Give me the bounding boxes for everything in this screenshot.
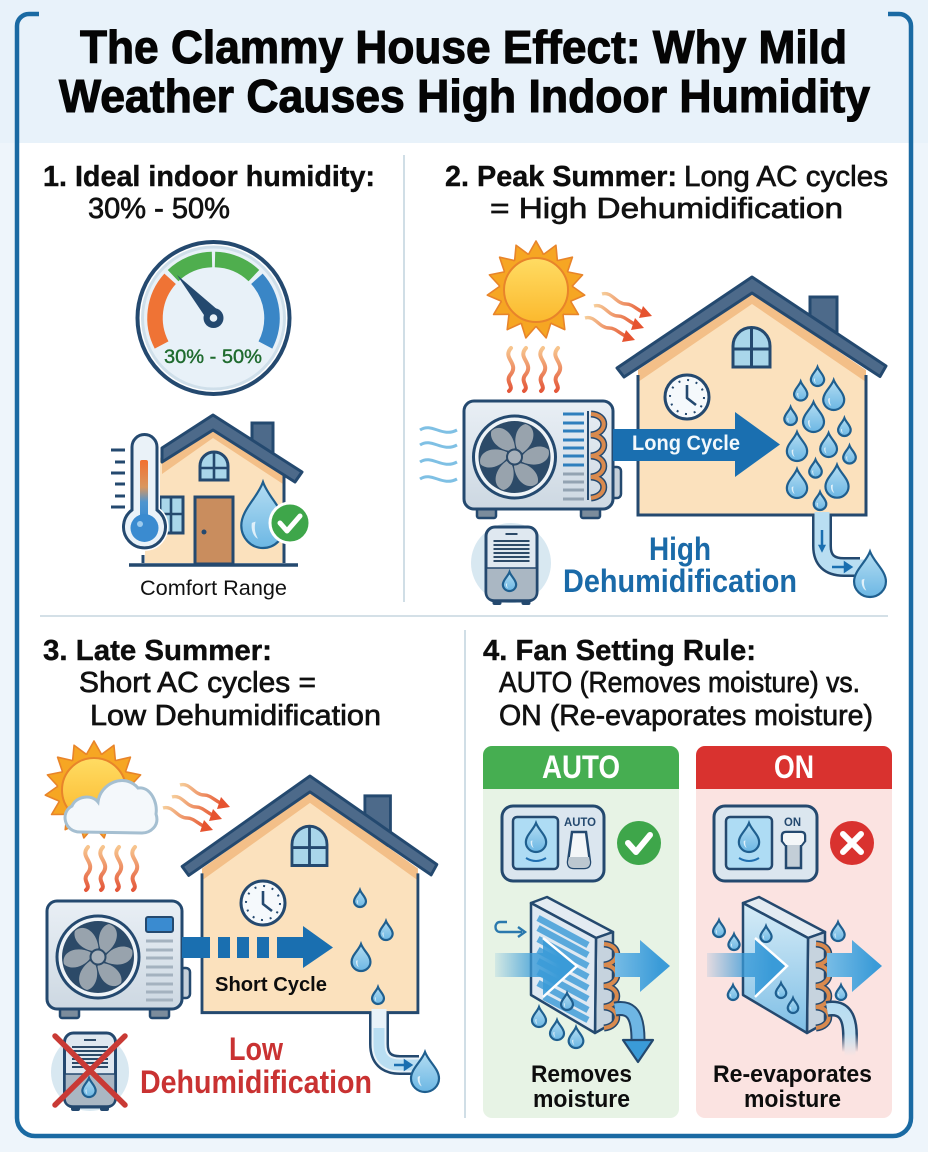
heading 3: Low Dehumidification — [90, 700, 381, 732]
heading 4 — [483, 635, 873, 732]
label: removes moisture: Removes — [531, 1061, 632, 1088]
fan switch: ON: ON — [784, 817, 801, 829]
heading 2: Long AC cycles — [684, 161, 888, 193]
title: Weather Causes High Indoor Humidity — [59, 70, 870, 122]
heat rising from unit — [508, 348, 560, 391]
fan switch: AUTO: AUTO — [564, 817, 596, 829]
caption: comfort range: Comfort Range — [140, 577, 287, 600]
card: ON — [696, 746, 892, 1118]
title — [59, 21, 870, 122]
card: AUTO — [483, 746, 679, 1118]
airflow out — [615, 940, 670, 992]
outdoor AC unit — [47, 901, 190, 1018]
label: high dehumidification — [563, 531, 797, 599]
heading 1: 1. Ideal indoor humidity: — [43, 161, 375, 193]
humidity gauge: 30% - 50% — [164, 346, 262, 368]
label: removes moisture — [531, 1061, 632, 1113]
title: The Clammy House Effect: Why Mild — [80, 21, 847, 73]
drain pipe: ON — [827, 1009, 850, 1056]
panel 3: late summer — [43, 635, 439, 1111]
airflow in — [707, 938, 787, 997]
heat rising from unit — [85, 847, 137, 890]
icon: check mark — [617, 821, 661, 865]
label: re-evaporates moisture — [713, 1061, 872, 1113]
icon: crossed-out dehumidifier — [51, 1033, 129, 1111]
airflow out — [827, 940, 882, 992]
label: low dehumidification: Low — [229, 1031, 283, 1067]
fan switch: AUTO — [502, 806, 604, 881]
icon: dehumidifier — [471, 523, 551, 605]
card header: ON: ON — [774, 749, 814, 785]
long cycle arrow — [613, 412, 780, 477]
large water drop — [411, 1052, 439, 1092]
heading 3 — [43, 635, 381, 732]
label: low dehumidification: Dehumidification — [140, 1064, 372, 1100]
panel 4: fan setting rule — [483, 635, 892, 1118]
fan switch: ON — [714, 806, 817, 881]
house with few drops — [182, 776, 437, 1013]
label: re-evaporates moisture: Re-evaporates — [713, 1061, 872, 1088]
icon: house with thermometer and drop — [111, 415, 310, 565]
label: removes moisture: moisture — [533, 1086, 630, 1113]
humidity gauge — [138, 242, 290, 394]
short cycle dashed arrow — [182, 926, 333, 968]
heading 1: 30% - 50% — [88, 193, 230, 225]
drain pipe — [820, 512, 864, 571]
icon: cross mark — [830, 821, 874, 865]
card header: AUTO — [483, 746, 679, 789]
card header: AUTO: AUTO — [542, 749, 620, 785]
heading 4: AUTO (Removes moisture) vs. — [499, 667, 860, 699]
drain pipe — [379, 1009, 424, 1069]
heading 2: 2. Peak Summer: — [445, 161, 677, 193]
wet cooling coil: ON — [743, 897, 829, 1033]
airflow in — [495, 938, 577, 997]
clock — [665, 375, 709, 419]
heat wave arrows — [163, 785, 230, 832]
house with moisture — [617, 277, 886, 515]
heading 1 — [43, 161, 375, 225]
heading 2 — [445, 161, 888, 225]
header band — [0, 0, 928, 143]
moisture drops — [784, 367, 856, 510]
panel 2: peak summer — [420, 161, 888, 605]
heading 4: 4. Fan Setting Rule: — [483, 635, 756, 667]
heading 3: 3. Late Summer: — [43, 635, 272, 667]
long cycle arrow: Long Cycle — [632, 431, 740, 455]
condensate drain arrow — [615, 1008, 653, 1062]
label: high dehumidification: High — [649, 531, 711, 567]
wind lines — [420, 428, 457, 481]
clock — [241, 881, 285, 925]
re-evaporating drops — [713, 920, 846, 1013]
cooling coil: AUTO — [531, 897, 617, 1033]
heat wave arrows — [585, 294, 652, 342]
heading 2: = High Dehumidification — [490, 193, 843, 225]
icon: sun — [486, 241, 586, 340]
airflow in outline — [543, 938, 577, 997]
heading 4: ON (Re-evaporates moisture) — [499, 700, 873, 732]
icon: sun behind cloud — [44, 741, 157, 840]
label: high dehumidification: Dehumidification — [563, 563, 797, 599]
moisture drops — [352, 890, 393, 1004]
label: low dehumidification — [140, 1031, 372, 1100]
falling drops — [532, 993, 583, 1048]
small bypass arrow — [496, 922, 525, 937]
panel 1: ideal indoor humidity — [43, 161, 375, 600]
large water drop — [854, 552, 886, 597]
airflow in outline — [755, 938, 787, 997]
heading 3: Short AC cycles = — [79, 667, 316, 699]
outdoor AC unit — [464, 401, 621, 518]
card header: ON — [696, 746, 892, 789]
label: short cycle: Short Cycle — [215, 974, 327, 996]
label: re-evaporates moisture: moisture — [744, 1086, 841, 1113]
